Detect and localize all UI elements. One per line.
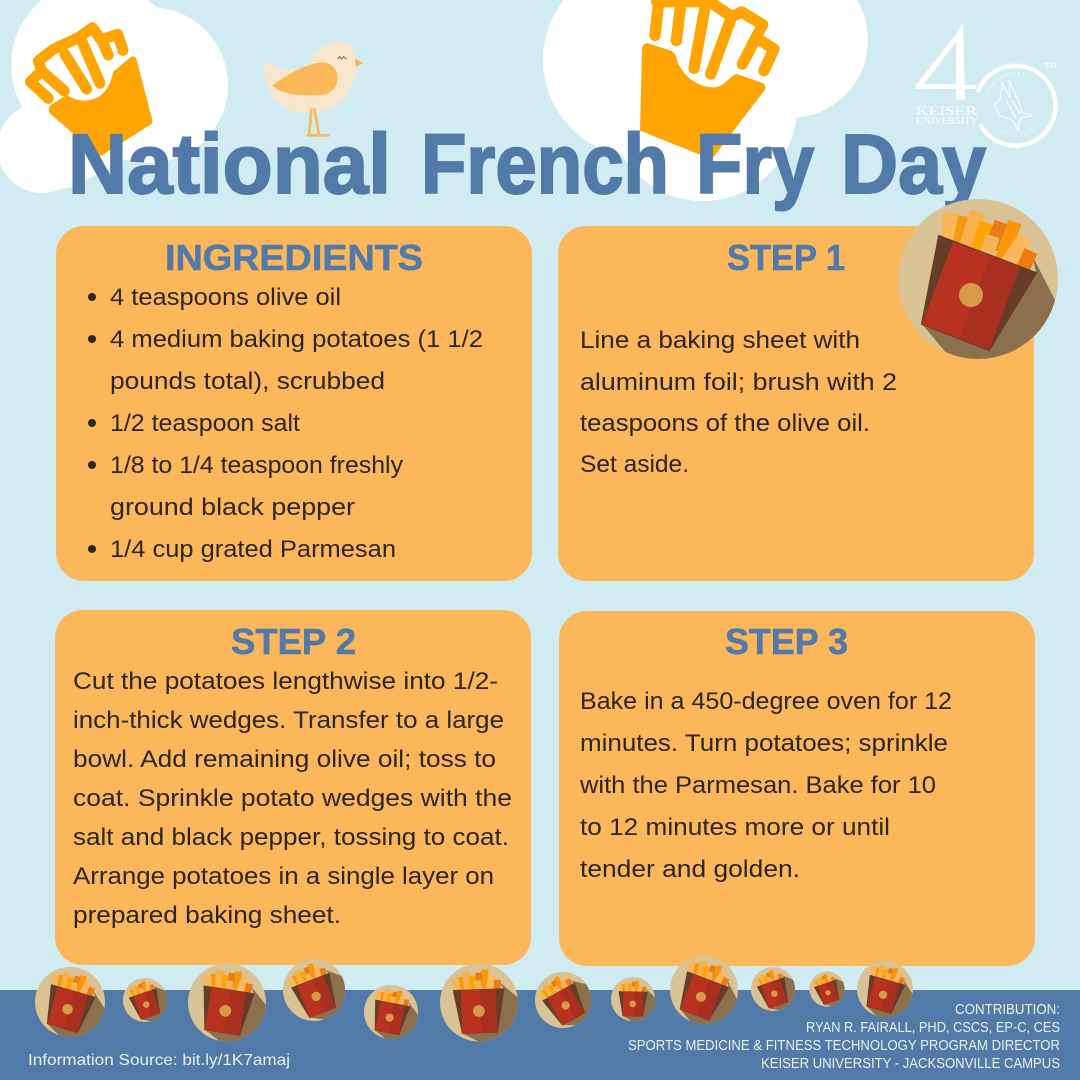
information source: Information Source: bit.ly/1K7amaj	[28, 1052, 290, 1069]
heading: step 2: STEP 2	[231, 621, 356, 662]
ingredients list: ground black pepper	[110, 494, 355, 521]
step 3 text: Bake in a 450-degree oven for 12	[580, 688, 952, 715]
ingredients list: pounds total), scrubbed	[110, 368, 385, 395]
title	[68, 117, 986, 211]
step 3 text: tender and golden.	[580, 856, 800, 883]
left cloud	[0, 0, 228, 193]
footer band	[0, 990, 1080, 1080]
step 1 text: Set aside.	[580, 451, 689, 478]
ingredients list: 4 medium baking potatoes (1 1/2	[110, 326, 483, 353]
ingredients list: 1/2 teaspoon salt	[110, 410, 300, 437]
logo: Keiser University 40th	[916, 22, 1058, 148]
step 3 text: to 12 minutes more or until	[580, 814, 890, 841]
step 3 text: with the Parmesan. Bake for 10	[579, 772, 936, 799]
title: Fry	[696, 117, 814, 211]
logo: Keiser University 40th: TH	[1044, 62, 1057, 70]
logo: Keiser University 40th: ANNIVERSARY	[986, 72, 1025, 94]
panel: step 2	[55, 610, 531, 965]
title: National	[68, 117, 391, 211]
step 2 text: Cut the potatoes lengthwise into 1/2-	[73, 668, 498, 695]
step 2 text: prepared baking sheet.	[73, 902, 341, 929]
step 2 text	[73, 668, 512, 929]
heading: step 3: STEP 3	[725, 621, 848, 662]
panel: step 1	[558, 226, 1034, 581]
icon: bird	[264, 42, 363, 135]
title: French	[421, 117, 669, 211]
step 2 text: salt and black pepper, tossing to coat.	[73, 824, 509, 851]
heading: ingredients: INGREDIENTS	[165, 237, 423, 278]
heading: step 1: STEP 1	[727, 237, 845, 278]
step 1 text: aluminum foil; brush with 2	[580, 369, 897, 396]
row of fries badges	[32, 946, 916, 1063]
icon: left french fries	[30, 28, 152, 156]
ingredients list: 1/8 to 1/4 teaspoon freshly	[110, 452, 403, 479]
step 3 text: minutes. Turn potatoes; sprinkle	[580, 730, 948, 757]
step 2 text: Arrange potatoes in a single layer on	[73, 863, 494, 890]
panel: ingredients	[56, 226, 532, 581]
logo: Keiser University 40th: 1977 - 2017	[998, 128, 1032, 136]
ingredients list: 4 teaspoons olive oil	[110, 284, 341, 311]
icon: right french fries	[640, 0, 774, 159]
panel: step 3	[559, 611, 1035, 966]
step 2 text: inch-thick wedges. Transfer to a large	[73, 707, 504, 734]
ingredients list	[88, 284, 483, 563]
step 1 text: Line a baking sheet with	[580, 327, 860, 354]
logo: Keiser University 40th: KEISER	[916, 103, 977, 118]
step 2 text: bowl. Add remaining olive oil; toss to	[73, 746, 496, 773]
contribution credits: CONTRIBUTION:	[955, 1002, 1060, 1018]
step 2 text: coat. Sprinkle potato wedges with the	[73, 785, 512, 812]
step 1 text	[580, 327, 897, 478]
contribution credits	[628, 1002, 1060, 1072]
logo: Keiser University 40th: UNIVERSITY	[916, 116, 978, 127]
step 3 text	[579, 688, 952, 883]
right cloud	[543, 0, 868, 201]
icon: fries badge top right	[898, 199, 1058, 379]
title: Day	[841, 117, 986, 211]
ingredients list: 1/4 cup grated Parmesan	[110, 536, 396, 563]
step 1 text: teaspoons of the olive oil.	[580, 410, 870, 437]
